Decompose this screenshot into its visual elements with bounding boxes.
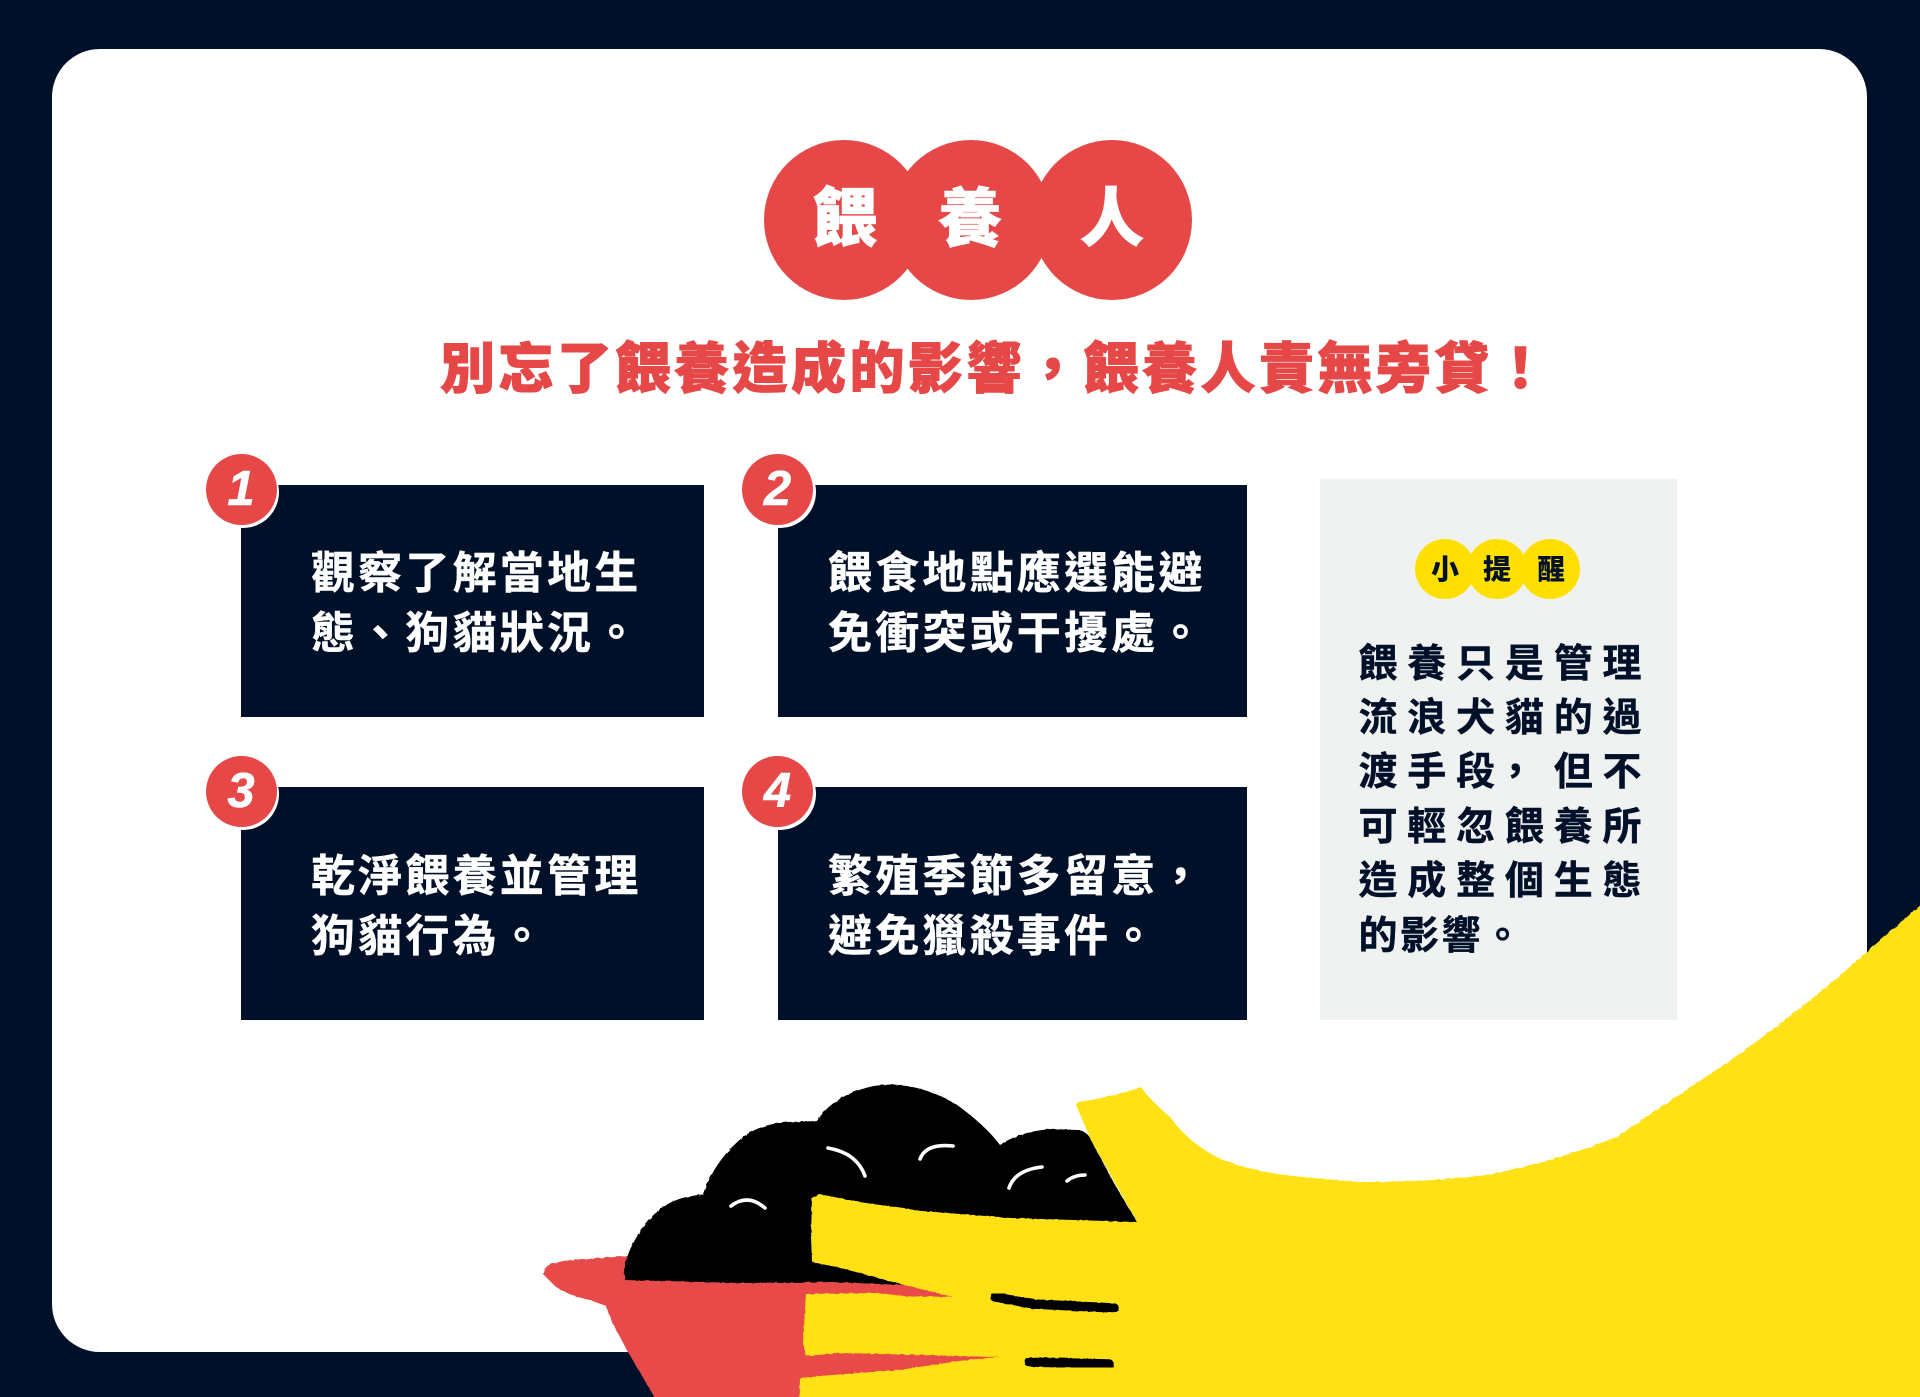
card 4 text [828,852,1206,961]
title: three red circles [764,140,1192,300]
number badge 1: 1 [227,462,255,516]
number badge 3: 3 [227,764,255,818]
card 3 text: 狗貓行為。 [311,912,547,961]
card 1 text: 觀察了解當地生 [311,549,641,598]
black food mound [624,1085,1137,1285]
card 1 text: 態、狗貓狀況。 [311,609,641,658]
reminder text: 渡手段，但不 [1358,751,1651,794]
card 1 [241,485,704,717]
card 3 text: 乾淨餵養並管理 [311,852,641,901]
reminder heading: yellow circles: 小 [1431,554,1459,585]
yellow hand [799,897,1920,1397]
card 3 [241,787,704,1020]
card 2 text: 免衝突或干擾處。 [828,609,1206,658]
reminder text: 造成整個生態 [1358,860,1651,903]
reminder heading: yellow circles [1415,539,1580,599]
subtitle: 別忘了餵養造成的影響，餵養人責無旁貸！ [440,338,1552,400]
number badge 4: 4 [764,764,791,818]
card 2 text: 餵食地點應選能避 [828,549,1206,598]
card 4 text: 避免獵殺事件。 [828,912,1158,961]
food highlights [731,1146,1085,1208]
red bowl [543,1256,1000,1397]
reminder text: 的影響。 [1358,914,1525,958]
reminder text: 餵養只是管理 [1358,642,1651,686]
card 4 [778,787,1247,1020]
card 1 text [311,549,641,658]
reminder text [1358,642,1651,958]
reminder text: 可輕忽餵養所 [1358,806,1651,849]
number badge 2 [742,454,816,528]
card 3 text [311,852,641,961]
title: three red circles: 養 [938,183,1002,255]
number badge 2: 2 [764,462,791,516]
card 4 text: 繁殖季節多留意， [828,852,1206,901]
card 2 text [828,549,1206,658]
reminder heading: yellow circles: 提 [1483,554,1511,585]
finger crease lines [995,1297,1114,1364]
title: three red circles: 餵 [813,183,877,255]
card 2 [778,485,1247,717]
title: three red circles: 人 [1080,183,1144,255]
reminder heading: yellow circles: 醒 [1537,554,1565,585]
panel: reminder [1320,479,1677,1020]
reminder text: 流浪犬貓的過 [1358,697,1651,740]
number badge 3 [206,756,279,830]
number badge 1 [206,454,279,528]
number badge 4 [742,756,816,830]
